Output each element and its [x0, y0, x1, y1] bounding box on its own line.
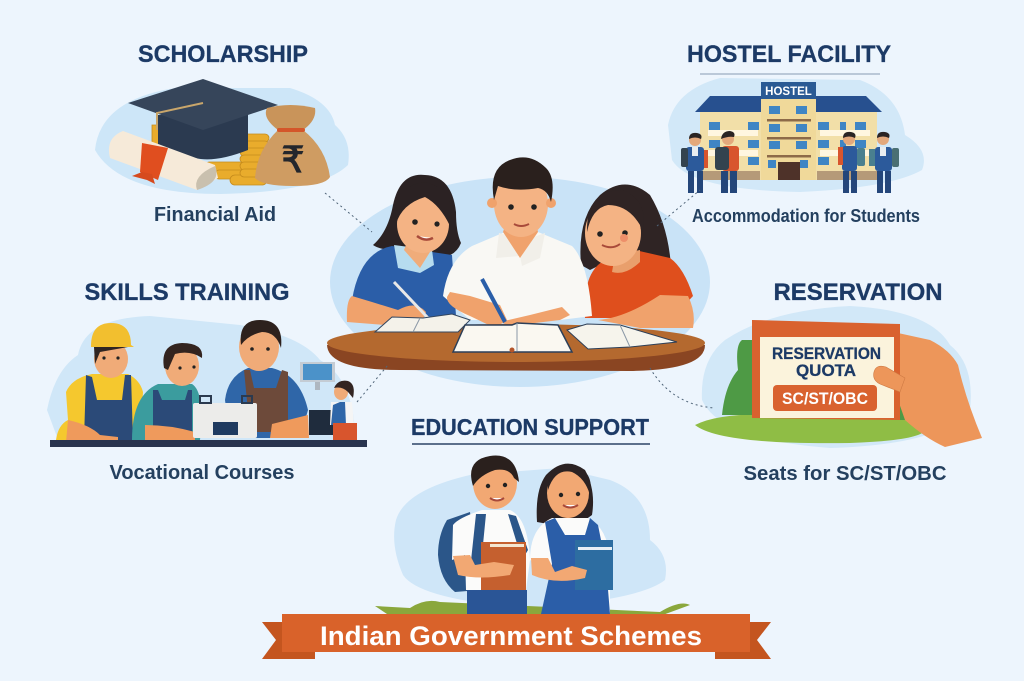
sign: RESERVATION: [772, 344, 881, 363]
worker with helmet: [56, 323, 143, 442]
hills: [375, 601, 690, 616]
banner: [262, 614, 771, 659]
banner: Indian Government Schemes: [320, 621, 702, 651]
open books: [375, 314, 677, 352]
student trainee: [132, 343, 202, 440]
heading: hostel facility: HOSTEL FACILITY: [687, 41, 891, 68]
connector lines: [325, 190, 715, 408]
label: seats: Seats for SC/ST/OBC: [744, 463, 946, 485]
girl student: [530, 464, 613, 614]
landscape: [695, 340, 926, 443]
girl right: [580, 184, 694, 328]
icon: money bag: [255, 105, 330, 186]
heading: reservation: RESERVATION: [774, 279, 942, 306]
panel: scholarship illustration: [95, 79, 349, 194]
machine: [193, 396, 257, 438]
heading: scholarship: SCHOLARSHIP: [138, 41, 308, 68]
label: vocational courses: Vocational Courses: [110, 462, 294, 484]
label: accommodation: Accommodation for Students: [692, 206, 920, 226]
icon: gold coins: [152, 125, 269, 185]
small worker: [330, 381, 357, 440]
icon: hostel building: HOSTEL: [765, 86, 812, 98]
computer monitor: [300, 362, 335, 435]
icon: diploma scroll: [109, 131, 218, 190]
instructor: [225, 320, 309, 438]
icon: hostel building: [695, 82, 882, 180]
panel: central illustration: [327, 157, 710, 387]
heading: skills training: SKILLS TRAINING: [84, 279, 290, 306]
label: financial aid: Financial Aid: [154, 204, 276, 226]
sign: SC/ST/OBC: [782, 389, 868, 408]
students near hostel: [681, 131, 899, 193]
panel: skills illustration: [47, 316, 367, 447]
girl left: [347, 175, 461, 325]
sign: [752, 320, 900, 420]
boy student: [438, 456, 530, 614]
heading: education support: EDUCATION SUPPORT: [411, 414, 649, 440]
table: [327, 324, 705, 371]
panel: reservation illustration: [695, 306, 982, 448]
icon: hand behind sign: [898, 333, 982, 447]
panel: education illustration: [375, 456, 690, 616]
panel: hostel illustration: [668, 78, 924, 193]
icon: thumb: [874, 366, 905, 392]
icon: money bag: ₹: [282, 139, 304, 180]
icon: graduation cap: [128, 79, 278, 159]
boy centre: [443, 157, 592, 328]
sign: QUOTA: [796, 361, 856, 380]
